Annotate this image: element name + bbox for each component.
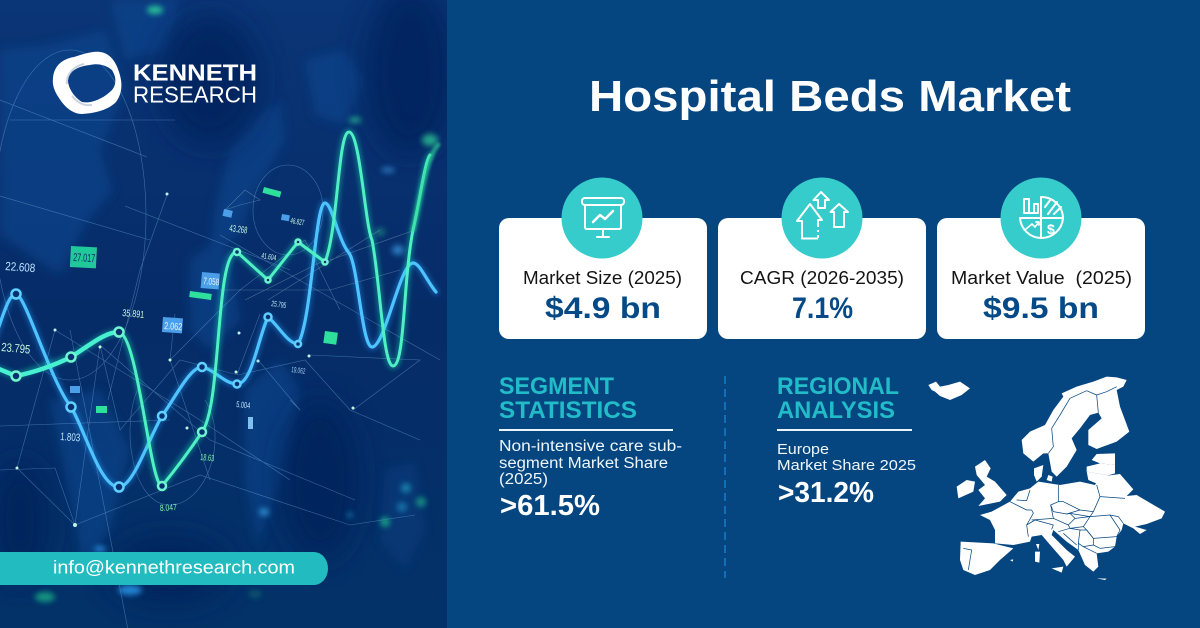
panel: market size card [499, 178, 707, 339]
heading: SEGMENT [499, 373, 614, 400]
description [499, 438, 682, 488]
chart data labels: 2.062 [164, 321, 183, 333]
heading [499, 373, 637, 424]
chart: green line [0, 132, 438, 486]
heading: ANALYSIS [777, 397, 895, 424]
chart data labels: 27.017 [73, 252, 95, 265]
chart data labels: 1.803 [60, 431, 81, 444]
description: Non-intensive care sub- [499, 438, 682, 455]
chart data labels: 46.827 [290, 216, 305, 227]
logo: Kenneth Research: RESEARCH [133, 82, 257, 108]
chart markers [12, 240, 328, 492]
chart data labels: 25.795 [271, 299, 287, 310]
section: segment statistics [499, 373, 682, 522]
chart data labels: 7.058 [203, 276, 220, 288]
heading [777, 373, 899, 424]
panel: market value card [937, 178, 1145, 339]
title: Hospital Beds Market [589, 72, 1071, 121]
chart: blue line [0, 203, 436, 487]
chart data labels: 8.047 [160, 502, 177, 513]
heading: REGIONAL [777, 373, 899, 400]
value: $4.9 bn [545, 292, 661, 325]
chart data labels [1, 187, 338, 513]
divider [724, 376, 726, 578]
chart data labels: 18.63 [200, 452, 215, 463]
section: regional analysis [777, 373, 916, 509]
world-map network lines [0, 50, 440, 628]
icon: rising arrows [782, 178, 862, 258]
chart data labels: 19.062 [291, 365, 306, 376]
chart data labels: 22.608 [5, 259, 36, 275]
chart data labels: 43.268 [229, 223, 248, 236]
label: Market Size (2025) [523, 268, 682, 288]
description: Market Share 2025 [777, 457, 916, 474]
description [777, 441, 916, 474]
icon: pie chart with finance symbols: $ [1047, 221, 1055, 237]
description: (2025) [499, 471, 548, 488]
value: 7.1% [792, 292, 853, 325]
panel: data visual photo [0, 0, 455, 628]
chart data labels: 41.604 [261, 251, 277, 263]
heading: STATISTICS [499, 397, 637, 424]
logo wordmark: KENNETH [133, 60, 257, 86]
map: Europe [928, 377, 1165, 580]
value: $9.5 bn [983, 292, 1099, 325]
background: right panel [447, 0, 1200, 628]
contact pill: info@kennethresearch.com [53, 558, 295, 578]
icon: presentation board [562, 178, 642, 258]
icon: pie chart with finance symbols [1000, 178, 1082, 258]
label: CAGR (2026-2035) [740, 268, 904, 288]
chart data labels: 23.795 [1, 340, 31, 357]
value: >61.5% [500, 490, 600, 522]
value: >31.2% [778, 477, 874, 509]
blurred bokeh lights [35, 6, 438, 602]
description: segment Market Share [499, 455, 668, 472]
panel: CAGR card [718, 178, 926, 339]
chart data labels: 35.891 [122, 308, 145, 321]
label: Market Value (2025) [951, 268, 1132, 288]
logo: Kenneth Research [53, 52, 257, 114]
chart data labels: 5.004 [236, 399, 251, 410]
icon: logo ring [53, 52, 121, 114]
description: Europe [777, 441, 829, 458]
contact pill [0, 552, 328, 585]
